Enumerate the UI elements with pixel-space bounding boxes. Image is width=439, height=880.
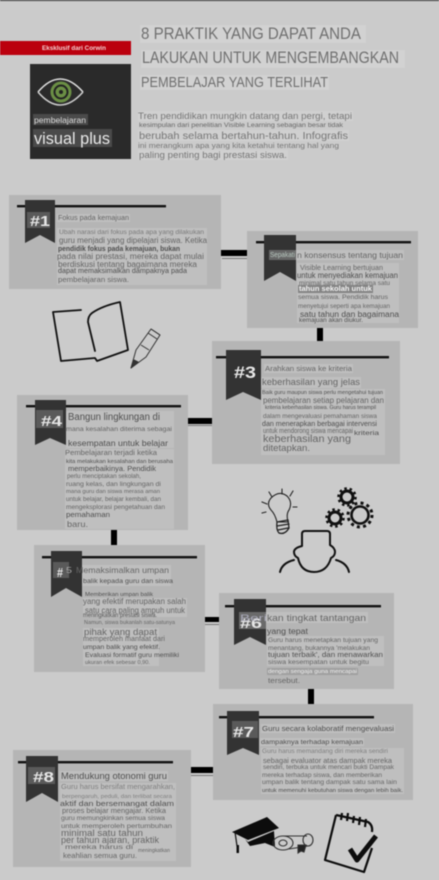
ribbon #5: 5 [66,565,72,575]
body 5: meningkatkan prestasi siswa. [83,613,157,619]
title: 8 PRAKTIK YANG DAPAT ANDA [141,24,362,43]
body 8: meningkatkan [138,848,170,854]
body 3: dalam mengevaluasi pemahaman siswa [263,414,378,420]
body 1: pendidik fokus pada kemajuan, bukan [58,244,180,253]
body 8: guru memungkinkan semua siswa [61,816,166,822]
icon: diploma scroll [273,834,313,853]
body 8: minimal satu tahun [61,828,143,838]
heading 6: kan tingkat tantangan [267,613,366,624]
ribbon #6 [234,599,266,645]
heading 4 [66,411,174,448]
panel: practice 7 [213,704,413,800]
intro text: Tren pendidikan mungkin datang dan pergi, tetapi [138,111,352,121]
body 6: tujuan terbaik', dan menawarkan [268,650,383,659]
body 4: mana guru dan siswa merasa aman [66,489,160,495]
intro text: berubah selama bertahun-tahun. Infografis [139,130,348,142]
body 3: Baik guru maupun siswa perlu mengetahui tujuan [262,390,383,396]
logo: pembelajaran visual plus: visual plus [34,129,110,148]
header banner: Eksklusif dari Corwin: Eksklusif dari Corwin [42,45,106,52]
ribbon #4: #4 [41,413,63,430]
body 3: kriteria keberhasilan siswa. Guru harus terampil [265,405,376,411]
heading 2: n konsensus tentang tujuan [297,250,403,260]
body 2: satu tahun dan bagaimana [300,310,400,319]
panel: practice 1 [9,195,221,289]
body 5: memperoleh manfaat dari [83,636,165,643]
body 6 [267,636,384,685]
panel: practice 8 [13,750,191,867]
heading 7: Guru secara kolaboratif mengevaluasi [262,724,394,733]
ribbon #8: #8 [33,769,54,786]
body 8: Guru harus bersifat mengarahkan, [61,784,175,791]
body 7 [261,748,404,794]
ribbon #2 [264,235,296,281]
body 4: kita melakukan kesalahan dan berusaha [66,459,173,465]
logo: pembelajaran visual plus: pembelajaran [34,115,86,125]
body 8: aktif dan bersemangat dalam [60,799,174,808]
connector 6 to 7 [308,689,314,704]
body 5 [83,592,187,666]
body 6: tersebut. [268,678,300,685]
connector 2 to 3 [317,328,323,341]
intro text [138,111,353,160]
body 7: sendiri, terbuka untuk mencari bukti Dampak [263,765,395,771]
icon: light bulb [262,489,297,533]
icon: person head [280,531,349,572]
body 4: ruang kelas, dan lingkungan di [66,481,161,488]
body 2: untuk menyediakan kemajuan [297,271,398,280]
body 5: satu cara paling ampuh untuk [85,606,186,615]
body 8: per tahun ajaran, praktik [61,835,159,845]
body 7: mereka terhadap siswa, dan memberikan [262,773,382,779]
body 1 [57,228,208,285]
body 3: pembelajaran setiap pelajaran dan [263,396,384,405]
ribbon #3 [226,350,261,400]
body 5: Namun, siswa bukanlah satu-satunya [84,620,175,626]
ribbon #8 [26,756,58,802]
body 8: keahlian semua guru. [63,851,137,860]
body 7: sebagai evaluator atas dampak mereka [263,756,393,765]
heading 4: mana kesalahan diterima sebagai [66,426,172,433]
body 1: pembelajaran siswa. [58,275,129,284]
body 6: siswa kesempatan untuk begitu [268,659,369,666]
panel: practice 4 [17,395,188,530]
heading 3 [261,364,361,388]
body 3: kriteria [354,431,380,437]
heading 6: yang tepat [267,627,309,636]
icon: open book [53,302,128,361]
body 4: baru. [67,519,88,529]
connector 1 to 2 [220,250,247,259]
body 5: yang efektif merupakan salah [83,597,186,606]
body 4: untuk belajar, belajar kembali, dan [66,497,161,503]
icon: gears [326,488,372,527]
connector 4 to 5 [111,530,117,545]
ribbon #3: #3 [234,363,256,382]
body 5: ukuran efek sebesar 0,90. [85,660,150,666]
heading 1: Fokus pada kemajuan [58,215,129,222]
body 2: semua siswa. Pendidik harus [298,294,389,301]
heading 5: balik kepada guru dan siswa [83,578,173,585]
heading 5 [76,565,173,586]
body 4 [65,449,174,529]
body 8: untuk memperoleh pertumbuhan [61,823,172,830]
body 1: berdiskusi tentang bagaimana mereka [58,260,198,269]
body 4: Pembelajaran terjadi ketika [65,450,157,457]
body 3: untuk mendorong siswa mencapai [263,428,353,435]
body 2: kemajuan akan diukur. [299,317,363,324]
intro text: ini merangkum apa yang kita ketahui tentang hal yang [138,143,339,150]
body 8: proses belajar mengajar. Ketika [62,808,166,815]
heading 5: Memaksimalkan umpan [76,565,169,575]
body 5: Memberikan umpan balik [85,592,153,598]
body 1: Ubah narasi dari fokus pada apa yang dilakukan [59,229,204,236]
body 3: ditetapkan. [263,443,310,454]
ribbon #1 [25,200,55,243]
ribbon #4 [35,400,66,445]
body 2: tahun sekolah untuk [299,284,373,293]
ribbon #2: Sepakati [270,250,295,259]
heading 7 [260,724,395,746]
ribbon #6: #6 [240,615,262,631]
body 4: perlu menciptakan sekolah, [67,474,141,480]
body 1: guru menjadi yang dipelajari siswa. Ketika [59,236,208,245]
heading 6: Beri [240,613,267,624]
panel: practice 3 [212,341,400,464]
body 1: dapat memaksimalkan dampaknya pada [58,268,187,275]
body 7: umpan balik tentang dampak satu sama lain [262,780,397,786]
body 3 [261,389,385,455]
heading 7: dampaknya terhadap kemajuan [261,739,363,746]
body 6: dengan sengaja guna mencapai [268,669,357,675]
body 4: memperbaikinya. Pendidik [68,464,156,473]
icon: notepad with checkmark [325,813,376,872]
body 3: dan menerapkan berbagai intervensi [262,421,377,428]
body 5: umpan balik yang efektif. [83,644,160,651]
ribbon #1: #1 [30,213,50,230]
panel: practice 6 [219,593,394,689]
body 6: menantang, bukannya 'melakukan [268,645,370,652]
intro text: paling penting bagi prestasi siswa. [139,150,287,160]
heading 4: kesempatan untuk belajar [68,438,168,448]
body 7: untuk memenuhi kebutuhan siswa dengan lebih baik. [262,788,404,794]
heading 6 [240,612,368,636]
body 2: minimal satu tahun selama satu [299,281,390,287]
ribbon #7 [227,711,259,755]
body 6: Guru harus menetapkan tujuan yang [268,637,378,644]
body 2 [297,263,400,324]
body 2: Visible Learning bertujuan [300,265,383,272]
heading 3: keberhasilan yang jelas [262,377,360,388]
body 8: berpengaruh, peduli, dan terlibat secara [62,794,173,800]
ribbon #5 [51,551,82,597]
connector 7 to 8 [191,767,213,776]
body 5: pihak yang dapat [84,627,158,637]
logo: pembelajaran visual plus [30,64,131,159]
icon: graduation cap [232,817,279,853]
connector 5 to 6 [205,617,219,625]
body 2: menyetujui seperti apa kemajuan [298,304,390,310]
header banner: Eksklusif dari Corwin [0,41,131,55]
title [140,24,405,91]
body 5: Evaluasi formatif guru memiliki [85,652,179,659]
body 8: mereka harus di [65,844,133,851]
title: PEMBELAJAR YANG TERLIHAT [141,74,328,91]
ribbon #7: #7 [233,724,254,741]
panel: practice 2 [247,231,418,328]
heading 4: Bangun lingkungan di [68,412,160,423]
body 4: pemahaman [66,512,110,519]
icon: pencil [131,329,160,368]
ribbon #5: # [57,565,64,580]
body 8 [60,783,176,861]
panel: practice 5 [34,545,205,672]
body 7: Guru harus memandang diri mereka sendiri [262,749,388,755]
body 1: pada nilai prestasi, mereka dapat mulai [57,252,204,261]
connector 3 to 4 [188,418,212,426]
heading 8: Mendukung otonomi guru [61,771,167,781]
body 4: mengeksplorasi pengetahuan dan [66,505,165,511]
intro text: kesimpulan dari penelitian Visible Learning sebagian besar tidak [139,122,344,129]
body 3: keberhasilan yang [263,434,351,445]
heading 3: Arahkan siswa ke kriteria [265,364,353,373]
